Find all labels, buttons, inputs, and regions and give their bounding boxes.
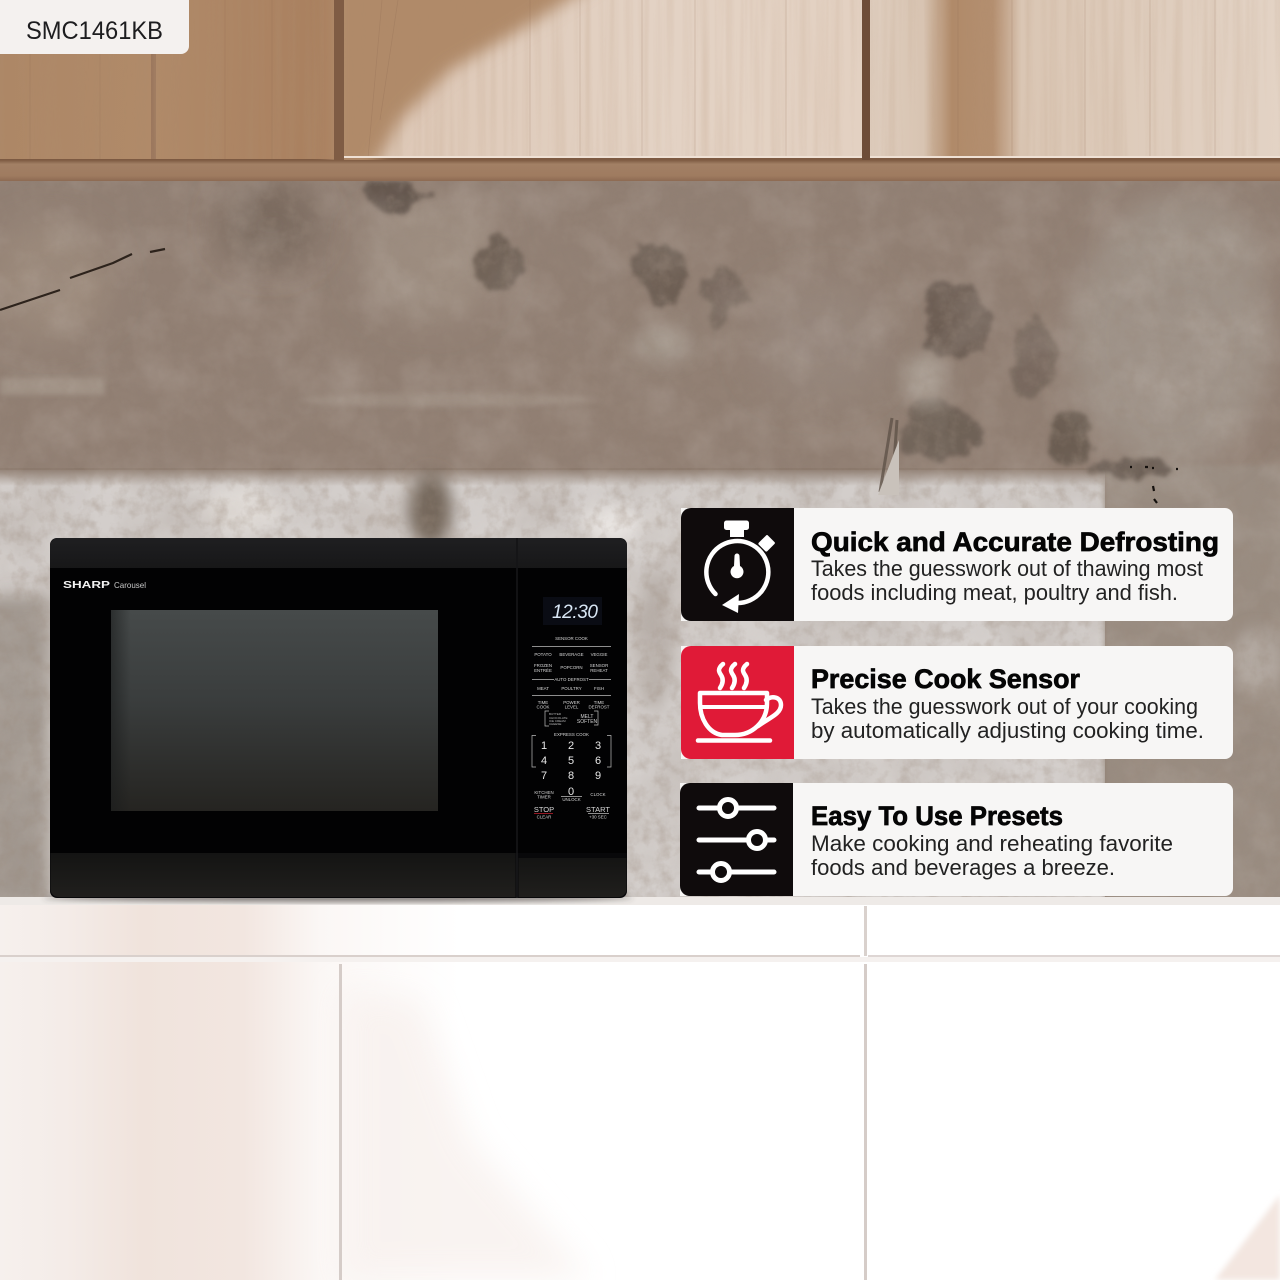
control panel labels: TIME <box>594 700 604 705</box>
control panel labels: BUTTER <box>549 712 562 716</box>
control panel labels: MEAT <box>537 686 549 691</box>
control panel labels: TIMER <box>537 794 551 800</box>
control panel labels: COOK <box>537 704 550 710</box>
control panel labels: CHOCOLATE <box>549 716 567 720</box>
control panel labels: +30 SEC <box>589 814 607 820</box>
control panel labels: KITCHEN <box>534 790 554 795</box>
heading: Quick and Accurate Defrosting <box>811 527 1219 557</box>
control panel labels: SOFTEN <box>577 719 598 725</box>
card: precise cook sensor <box>681 646 1233 759</box>
control panel labels: FROZEN <box>534 663 552 668</box>
marble dark patches <box>362 181 1174 484</box>
body text <box>811 831 1173 880</box>
microwave top bar <box>50 538 516 568</box>
body text <box>811 556 1203 605</box>
model number tag <box>0 0 189 54</box>
body text: foods including meat, poultry and fish. <box>811 580 1178 605</box>
control panel labels: CLOCK <box>590 792 606 797</box>
microwave window <box>111 610 438 811</box>
background: white lower cabinets <box>0 897 1280 1280</box>
control panel labels: BEVERAGE <box>559 652 584 657</box>
control panel labels: CHEESE <box>549 722 561 726</box>
microwave bottom bar <box>50 853 515 897</box>
control panel labels: UNLOCK <box>562 797 581 802</box>
heading: Easy To Use Presets <box>811 801 1063 831</box>
control panel labels: FISH <box>594 686 604 691</box>
control panel labels: CLEAR <box>537 814 551 820</box>
keypad digits: 9 <box>595 770 601 782</box>
control panel labels: VEGGIE <box>591 652 607 657</box>
body text: by automatically adjusting cooking time. <box>811 718 1204 743</box>
card: quick and accurate defrosting <box>681 508 1233 621</box>
digital display <box>543 597 602 625</box>
SHARP Carousel logo: Carousel <box>114 580 146 590</box>
control panel labels: STOP <box>534 805 554 814</box>
keypad digits: 0 <box>568 786 574 798</box>
body text <box>811 694 1204 743</box>
control panel labels: REHEAT <box>590 668 608 673</box>
SHARP Carousel logo <box>63 580 146 591</box>
body text: Make cooking and reheating favorite <box>811 831 1173 856</box>
body text: Takes the guesswork out of your cooking <box>811 694 1198 719</box>
control panel labels: POWER <box>563 700 580 705</box>
control panel labels: EXPRESS COOK <box>554 732 589 737</box>
control panel labels: POULTRY <box>561 686 582 691</box>
control panel labels: ICE CREAM <box>549 719 566 723</box>
keypad digits: 5 <box>568 755 574 767</box>
model number tag: SMC1461KB <box>26 17 163 45</box>
control panel labels: MELT <box>581 714 593 720</box>
control panel labels: ENTRÉE <box>534 668 552 673</box>
control panel labels: TIME <box>538 700 548 705</box>
control panel labels <box>534 636 610 820</box>
SHARP Carousel logo: SHARP <box>63 580 110 591</box>
control panel labels: LEVEL <box>565 704 579 710</box>
microwave <box>43 538 633 902</box>
keypad digits: 1 <box>541 740 547 752</box>
background: marble backsplash <box>0 181 1280 910</box>
keypad digits: 4 <box>541 755 547 767</box>
heading: Precise Cook Sensor <box>811 664 1080 694</box>
body text: Takes the guesswork out of thawing most <box>811 556 1203 581</box>
control panel labels: DEFROST <box>589 704 610 710</box>
marble light patches <box>0 325 949 407</box>
keypad digits: 7 <box>541 770 547 782</box>
icon: sliders <box>680 783 793 896</box>
marble light lower band <box>0 470 1105 910</box>
control panel labels: START <box>586 805 610 814</box>
card: easy to use presets <box>680 783 1233 896</box>
background: wood upper cabinets <box>0 0 1280 181</box>
control panel labels: SENSOR <box>590 663 608 668</box>
keypad digits <box>541 740 601 798</box>
control panel labels: POTATO <box>534 652 552 657</box>
control panel labels: POPCORN <box>560 665 583 670</box>
digital display: 12:30 <box>552 602 598 623</box>
icon: stopwatch <box>681 508 794 621</box>
icon: steaming cup <box>681 646 794 759</box>
keypad digits: 8 <box>568 770 574 782</box>
keypad digits: 6 <box>595 755 601 767</box>
control panel labels: AUTO DEFROST <box>554 677 589 682</box>
control panel labels: SENSOR COOK <box>555 636 588 641</box>
keypad digits: 2 <box>568 740 574 752</box>
keypad digits: 3 <box>595 740 601 752</box>
body text: foods and beverages a breeze. <box>811 855 1115 880</box>
marble crack <box>0 249 165 310</box>
